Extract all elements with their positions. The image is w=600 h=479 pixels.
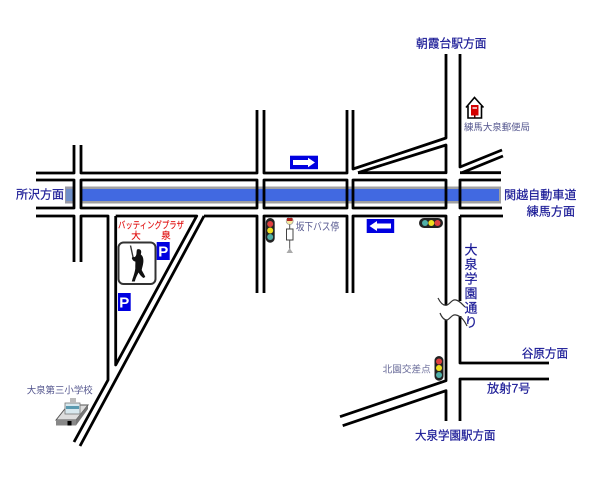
destination: Oizumi-gakuen Station: 大泉学園駅方面 bbox=[415, 428, 496, 442]
label: Batting Plaza name bbox=[118, 220, 184, 242]
label: post office: 練馬大泉郵便局 bbox=[464, 122, 530, 134]
icon: parking near plaza: P bbox=[158, 244, 168, 260]
road name: Oizumi-gakuen Street: 園 bbox=[464, 286, 478, 301]
road name: Oizumi-gakuen Street: り bbox=[464, 315, 478, 330]
icon: school bbox=[56, 398, 88, 426]
icon: batter bbox=[118, 242, 156, 284]
road name: Oizumi-gakuen Street: 泉 bbox=[464, 257, 478, 272]
direction arrow: right bbox=[290, 156, 318, 169]
icon: post office bbox=[466, 98, 484, 118]
expressway band bbox=[65, 186, 501, 204]
label: Batting Plaza name: 大 bbox=[131, 230, 141, 242]
road name: Oizumi-gakuen Street bbox=[464, 242, 478, 330]
road name: Radial Route 7: 放射7号 bbox=[487, 380, 530, 396]
icon: parking lower: P bbox=[119, 294, 129, 312]
road break wave bbox=[438, 298, 467, 326]
icon: bus stop bbox=[286, 218, 293, 253]
destination: Nerima: 練馬方面 bbox=[527, 204, 575, 218]
road name: Oizumi-gakuen Street: 学 bbox=[464, 272, 478, 286]
destination: Asakadai Station: 朝霞台駅方面 bbox=[416, 36, 486, 50]
destination: Kan-Etsu Expressway: 関越自動車道 bbox=[504, 188, 576, 202]
label: Oizumi No.3 Elementary School: 大泉第三小学校 bbox=[27, 384, 93, 396]
direction arrow: left bbox=[367, 219, 394, 233]
label: Batting Plaza name: バッティングプラザ bbox=[118, 220, 184, 232]
label: Kitazono intersection: 北園交差点 bbox=[383, 364, 431, 376]
destination: Tokorozawa: 所沢方面 bbox=[16, 186, 64, 202]
label: Batting Plaza name: 泉 bbox=[161, 230, 171, 242]
traffic signal: Kitazono intersection bbox=[434, 356, 444, 381]
road name: Oizumi-gakuen Street: 大 bbox=[464, 242, 478, 258]
label: bus stop: 坂下バス停 bbox=[296, 220, 340, 233]
road name: Oizumi-gakuen Street: 通 bbox=[464, 300, 478, 316]
traffic signal: horizontal bbox=[419, 218, 443, 228]
road network bbox=[36, 54, 549, 446]
traffic signal: vertical at Sakashita bbox=[266, 218, 275, 243]
destination: Yahara: 谷原方面 bbox=[522, 346, 568, 360]
